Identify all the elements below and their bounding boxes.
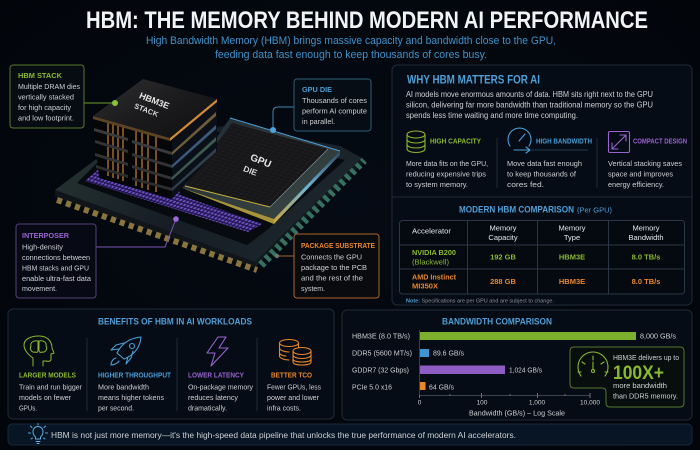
bar: GDDR7: 1,024 GB/s [509, 368, 542, 374]
callout: HBM stack [10, 65, 118, 128]
feature: high bandwidth [507, 128, 592, 189]
comparison table: 8.0 TB/s [632, 277, 660, 286]
footer banner: HBM is not just more memory—it's the high-speed data pipeline that unlocks the true performance of modern AI accelerators. [51, 430, 516, 440]
interposer bumps [85, 150, 262, 232]
comparison table: Bandwidth [628, 233, 664, 242]
callout: 100X: HBM3E delivers up to [613, 355, 679, 362]
bar: PCIe: PCIe 5.0 x16 [352, 384, 392, 392]
benefit: larger models: GPUs. [19, 406, 37, 412]
callout: HBM stack: Multiple DRAM dies [18, 84, 80, 91]
comparison table: Type [564, 233, 580, 242]
bar: GDDR7 [352, 366, 542, 374]
GPU die: DIE [243, 163, 258, 178]
comparison heading: (Per GPU) [577, 206, 612, 214]
panel: bandwidth comparison [342, 310, 692, 420]
benefit: larger models: Train and run bigger [19, 384, 83, 392]
comparison table: AMD Instinct [412, 274, 457, 282]
bar chart: Bandwidth (GB/s) – Log Scale [469, 410, 565, 418]
bar: DDR5: 89.6 GB/s [433, 350, 464, 358]
GPU die: GPU [249, 152, 272, 171]
comparison table: Memory [632, 224, 660, 232]
callout: interposer: enable ultra-fast data [22, 276, 91, 283]
callout: package substrate: system. [301, 286, 325, 293]
feature: high capacity: HIGH CAPACITY [430, 138, 481, 146]
comparison heading: MODERN HBM COMPARISON [459, 204, 574, 214]
feature: high bandwidth: Move data fast enough [507, 159, 582, 168]
callout: HBM stack: and low footprint. [18, 116, 74, 122]
heading: bandwidth: BANDWIDTH COMPARISON [442, 316, 552, 326]
bar chart [352, 330, 677, 418]
comparison table: MI350X [412, 284, 438, 290]
feature: compact design: space and improves [608, 169, 673, 178]
bar chart: 1,000 [529, 400, 546, 406]
callout: HBM stack: vertically stacked [18, 94, 74, 102]
bar chart: 0 [418, 400, 422, 406]
benefit: lower latency [188, 337, 253, 412]
panel: benefits [8, 309, 334, 419]
benefit: lower latency: On-package memory [188, 384, 253, 392]
HBM stack: HBM3E [139, 90, 171, 112]
bar: PCIe: 64 GB/s [429, 384, 454, 392]
callout: GPU die: Thousands of cores [302, 98, 368, 105]
comparison table: Capacity [488, 233, 518, 242]
feature: compact design: Vertical stacking saves [608, 159, 682, 168]
comparison table: HBM3E [559, 277, 585, 286]
callout: interposer: connections between [22, 255, 90, 262]
benefit: larger models: models on fewer [19, 395, 72, 402]
benefit: higher throughput: means higher tokens [98, 395, 165, 402]
comparison table: (Blackwell) [412, 260, 449, 266]
benefit: higher throughput [98, 337, 172, 412]
bar chart: 10,000 [580, 400, 600, 406]
bar chart: 100 [477, 400, 488, 406]
bar: DDR5 [352, 349, 464, 358]
comparison table [400, 220, 684, 294]
callout: package substrate: package to the PCB [301, 265, 367, 272]
callout: package substrate: PACKAGE SUBSTRATE [301, 241, 375, 250]
bar: HBM3E [352, 332, 677, 340]
benefit: higher throughput: per second. [98, 406, 134, 412]
benefit: better TCO: infra costs. [267, 406, 301, 412]
bar: HBM3E: 8,000 GB/s [640, 334, 677, 340]
feature: compact design: energy efficiency. [608, 180, 664, 189]
feature: high bandwidth: cores fed. [507, 180, 544, 189]
callout: GPU die [270, 79, 371, 133]
benefit: better TCO [267, 340, 321, 412]
comparison table: Accelerator [412, 226, 452, 236]
benefit: better TCO: BETTER TCO [271, 372, 312, 380]
callout: 100X: than DDR5 memory. [613, 394, 678, 400]
chip illustration [55, 79, 364, 270]
HBM stack: STACK [134, 101, 159, 119]
benefit: larger models: LARGER MODELS [19, 372, 76, 380]
subtitle: feeding data fast enough to keep thousands of cores busy. [215, 49, 487, 61]
feature: high bandwidth: HIGH BANDWIDTH [536, 138, 592, 146]
footer banner [8, 424, 692, 445]
benefit: better TCO: power and lower [267, 395, 320, 402]
callout: interposer: movement. [22, 286, 57, 293]
callout: 100X: more bandwidth [613, 383, 667, 390]
bar: GDDR7: GDDR7 (32 Gbps) [352, 368, 409, 374]
feature: compact design: COMPACT DESIGN [633, 138, 687, 146]
heading: why HBM matters: WHY HBM MATTERS FOR AI [407, 74, 540, 86]
callout: interposer: High-density [22, 244, 64, 252]
intro text: silicon, delivering far more bandwidth than traditional memory so the GPU [406, 100, 653, 109]
comparison table: 288 GB [490, 277, 517, 286]
callout: GPU die: GPU DIE [302, 85, 332, 94]
benefit: higher throughput: HIGHER THROUGHPUT [98, 372, 172, 380]
feature: high capacity: More data fits on the GPU, [406, 159, 488, 168]
bar: HBM3E: HBM3E (8.0 TB/s) [352, 334, 410, 340]
comparison table: HBM3E [559, 252, 585, 262]
intro text: AI models move enormous amounts of data. HBM sits right next to the GPU [406, 90, 653, 99]
feature: compact design [608, 132, 687, 189]
comparison table: NVIDIA B200 [412, 250, 456, 257]
comparison table: Memory [558, 224, 586, 232]
callout: 100X: 100X+ [613, 363, 664, 384]
callout: 100X [570, 347, 684, 407]
bar: PCIe [352, 382, 454, 392]
callout: HBM stack: HBM STACK [18, 71, 63, 80]
table note: Note: Specifications are per GPU and are subject to change. [406, 298, 554, 304]
feature: high capacity: to system memory. [406, 180, 468, 189]
heading: benefits: BENEFITS OF HBM IN AI WORKLOADS [98, 316, 252, 326]
benefit: lower latency: LOWER LATENCY [188, 372, 244, 380]
callout: GPU die: in parallel. [302, 119, 335, 126]
package substrate [55, 125, 364, 270]
callout: package substrate: and the rest of the [301, 276, 363, 282]
subtitle: High Bandwidth Memory (HBM) brings massive capacity and bandwidth close to the GPU, [146, 35, 556, 47]
comparison table: Memory [489, 224, 517, 232]
callout: package substrate [275, 234, 379, 298]
callout: package substrate: Connects the GPU [301, 254, 362, 262]
benefit: lower latency: dramatically. [188, 406, 227, 412]
comparison table: 8.0 TB/s [632, 252, 660, 262]
HBM stack [93, 79, 217, 199]
feature: high capacity: reducing expensive trips [406, 169, 486, 178]
intro text: spends less time waiting and more time computing. [406, 111, 578, 120]
feature: high capacity [406, 131, 488, 189]
benefit: lower latency: reduces latency [188, 395, 239, 402]
feature: high bandwidth: to keep thousands of [507, 169, 577, 178]
callout: GPU die: perform AI compute [302, 108, 367, 116]
GPU die [182, 118, 340, 224]
callout: interposer [16, 216, 179, 298]
callout: HBM stack: for high capacity [18, 105, 72, 112]
benefit: higher throughput: More bandwidth [98, 384, 149, 392]
panel: why HBM matters [392, 65, 692, 305]
bar: DDR5: DDR5 (5600 MT/s) [352, 350, 412, 358]
subtitle [146, 35, 556, 61]
callout: interposer: HBM stacks and GPU [22, 266, 89, 272]
callout: interposer: INTERPOSER [22, 231, 70, 240]
intro text [406, 90, 653, 120]
comparison table: 192 GB [490, 252, 517, 262]
benefit: better TCO: Fewer GPUs, less [267, 384, 321, 392]
icon: light bulb [28, 424, 48, 444]
benefit: larger models [19, 336, 83, 412]
